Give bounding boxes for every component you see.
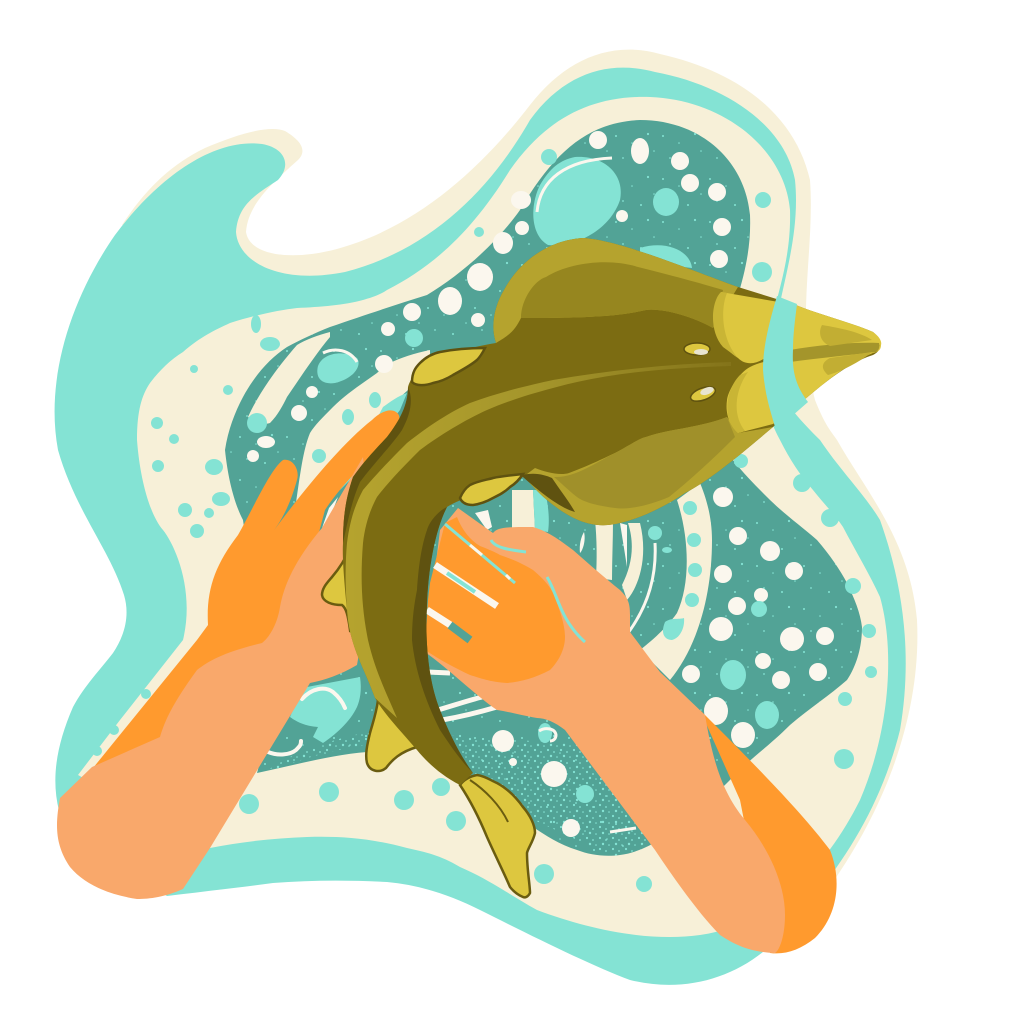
right arm: orange shaded edge bbox=[700, 710, 837, 953]
fish: lower fin bbox=[366, 700, 417, 771]
fish: belly shadow bbox=[412, 507, 473, 773]
fish: head lower mid tone bbox=[554, 417, 735, 508]
fish: tail groove bbox=[470, 780, 508, 822]
right hand: finger gaps bbox=[427, 524, 585, 642]
background: teal water blob bbox=[55, 68, 906, 985]
fish: head upper mid tone bbox=[521, 262, 723, 328]
right hand and arm bbox=[425, 508, 837, 953]
left hand: light palm and forearm bbox=[57, 457, 375, 899]
right arm: light forearm and thumb bbox=[425, 508, 785, 953]
fish: upper snout bbox=[713, 292, 881, 363]
background: teal patches bbox=[340, 393, 684, 743]
fish: light lateral band bbox=[346, 362, 731, 718]
fish: body silhouette bbox=[343, 238, 880, 785]
background: cream swirl bands bbox=[248, 332, 712, 680]
left hand and arm bbox=[57, 410, 399, 899]
fish: snout shading bbox=[713, 292, 748, 433]
teal dots bbox=[92, 149, 877, 892]
fish: lower pectoral fin bbox=[460, 474, 523, 505]
right hand: orange palm and fingers bbox=[425, 517, 565, 683]
background: white swirl strokes bbox=[427, 510, 655, 832]
left hand: orange back of hand and fingers bbox=[93, 410, 399, 768]
background: teal bubbles with white highlights bbox=[247, 157, 692, 754]
foreground: teal wave strip over the fish snout bbox=[763, 296, 808, 430]
fish: tail fin bbox=[460, 775, 535, 897]
fish: lower snout bbox=[727, 345, 881, 433]
background: speckle texture bbox=[220, 115, 870, 860]
illustration: fish held by two hands on a water blob bbox=[54, 50, 918, 985]
fish: upper pectoral fin bbox=[412, 348, 485, 385]
background: cream inner blob bbox=[78, 97, 888, 937]
background: dark teal blob bbox=[225, 120, 862, 856]
fish: head lower rim bbox=[523, 417, 773, 525]
white dots bbox=[247, 131, 834, 837]
fish: lower nostril bbox=[689, 384, 717, 404]
fish: left side fin bbox=[322, 548, 360, 630]
fish bbox=[322, 238, 881, 897]
left hand: white sliver beside palm bbox=[322, 497, 338, 528]
fish: head upper rim bbox=[493, 238, 738, 343]
background: cream outer blob bbox=[122, 50, 917, 925]
fish: upper nostril bbox=[684, 343, 710, 355]
fish: dark back edge bbox=[343, 387, 411, 543]
fish: notch shadow behind fin bbox=[523, 474, 575, 512]
